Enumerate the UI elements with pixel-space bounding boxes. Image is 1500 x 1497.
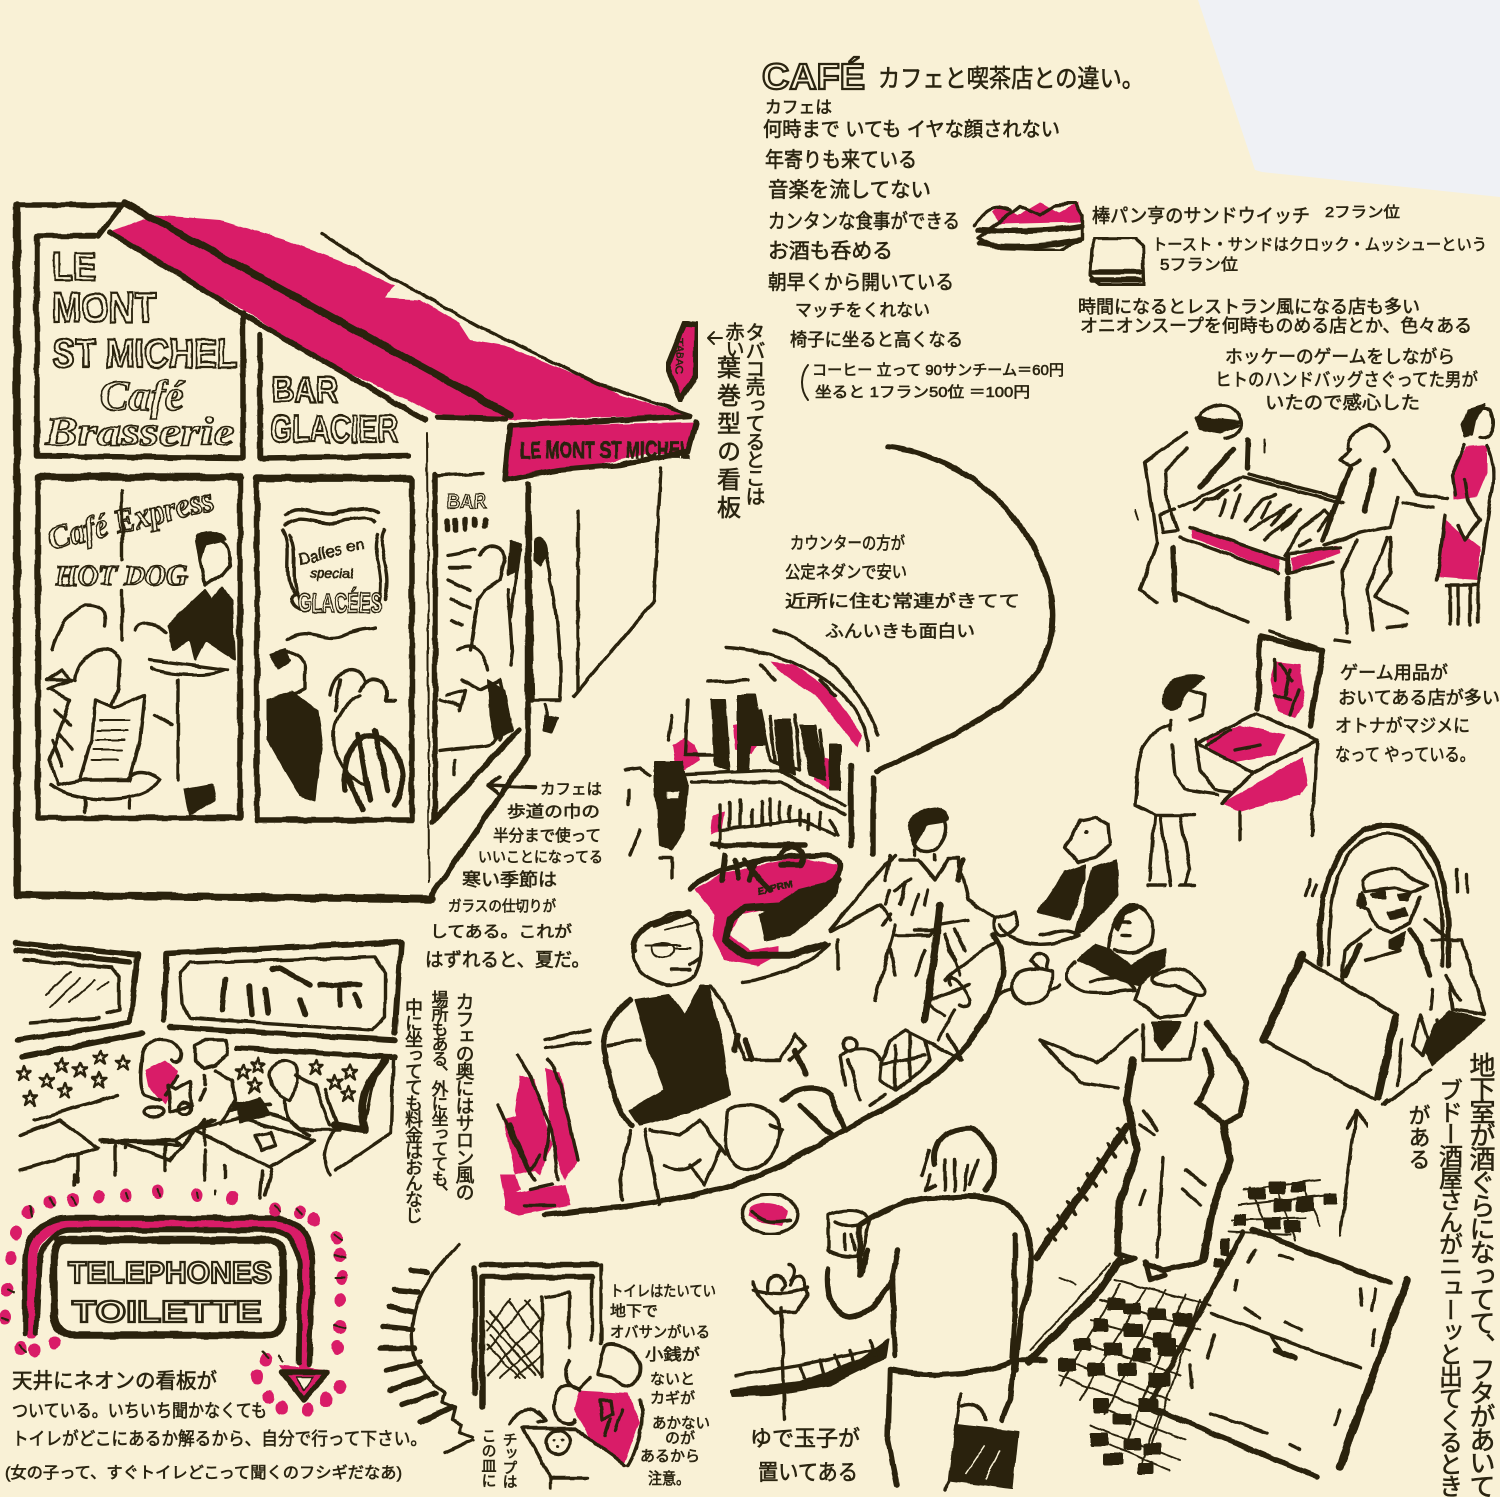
counter caption: 公定ネダンで安い (785, 563, 907, 582)
pinball machine caption: ゲーム用品が (1340, 663, 1448, 683)
sidewalk caption: 半分まで使って (493, 827, 601, 845)
bottom right vertical caption: ブドー酒屋さんがニューッと出てくるとき (1434, 1078, 1462, 1497)
waiter (197, 534, 230, 585)
valance lettering: LE MONT ST MICHEL (520, 437, 690, 464)
ashtray (742, 1194, 798, 1234)
percolator left (655, 762, 688, 850)
salon caption (403, 990, 474, 1223)
toilet caption: のが (665, 1430, 695, 1447)
counter caption: カウンターの方が (790, 534, 905, 553)
pinball machine caption (1335, 663, 1500, 765)
icon: toast sandwich (1090, 238, 1144, 285)
neon sign (0, 1185, 348, 1417)
milk jug (725, 1105, 779, 1170)
differences list: 音楽を流してない (768, 179, 931, 202)
neon caption: ついている。いちいち聞かなくても (12, 1401, 267, 1421)
toilet caption: カギが (650, 1390, 695, 1407)
tip plate caption: チップは (500, 1432, 518, 1489)
tabac arrow (708, 332, 722, 344)
pink woman (145, 1060, 178, 1105)
sign: Le Mont St Michel (44, 245, 238, 454)
telephones toilette lettering: TOILETTE (72, 1294, 262, 1329)
stars (17, 1050, 357, 1105)
player right (1340, 425, 1389, 465)
sign: Le Mont St Michel: MONT (52, 284, 156, 331)
differences list: お酒も呑める (768, 240, 893, 263)
toilet caption: あるから (640, 1448, 700, 1465)
tables (20, 1118, 315, 1198)
passer-by (532, 540, 561, 730)
salon caption: カフェの奥にはサロン風の (452, 992, 474, 1200)
window: glaces: GLACÉES (298, 587, 382, 618)
glass (828, 1210, 870, 1257)
boiled eggs caption (750, 1426, 860, 1485)
toilet caption: 小銭が (645, 1346, 700, 1364)
pinball machine caption: なって やっている。 (1335, 745, 1475, 765)
window: glaces (268, 508, 402, 810)
boiled eggs caption: ゆで玉子が (750, 1426, 860, 1451)
sidewalk caption: してある。これが (430, 923, 572, 941)
differences list: 朝早くから開いている (768, 271, 954, 294)
salon caption: 場所もある、外に坐ってても、 (428, 990, 448, 1200)
sidewalk lines (527, 468, 661, 700)
cellar arrow (1340, 1110, 1367, 1235)
counter caption (785, 534, 1020, 641)
sidewalk caption (425, 781, 603, 971)
coffee machine (691, 855, 839, 889)
back patrons (330, 670, 395, 785)
customers (52, 605, 228, 675)
awning (110, 203, 696, 480)
bottom right vertical caption (1406, 1052, 1496, 1497)
hockey game caption (1215, 347, 1478, 413)
bentwood chair (344, 730, 402, 810)
bowl of eggs (753, 1265, 808, 1420)
differences list (763, 98, 1060, 350)
pointer line (781, 1308, 785, 1420)
illustration: waiter (830, 808, 995, 1020)
sign: Bar Glacier (270, 369, 398, 451)
tabac caption: タバコ売ってるとこは (742, 322, 765, 504)
grating small (1228, 1180, 1330, 1240)
toilet caption: ないと (650, 1371, 695, 1388)
coffee prices: 坐ると 1フラン50位 ＝100円 (815, 384, 1030, 401)
toilet caption: あかない (652, 1415, 710, 1432)
illustration: table edge hatch (730, 1340, 888, 1396)
pinball machine caption: おいてある店が多い (1338, 688, 1500, 708)
illustration: man from behind with bag (827, 1128, 1031, 1490)
coffee prices: コーヒー 立って 90サンチーム＝60円 (812, 362, 1064, 379)
restaurant note (1078, 297, 1472, 336)
sign: Bar Glacier: GLACIER (270, 409, 398, 451)
salon man (195, 1040, 235, 1125)
grating large (1060, 1280, 1210, 1470)
neon tube (32, 1224, 306, 1365)
pinball machine caption: オトナがマジメに (1335, 716, 1470, 736)
differences list: 年寄りも来ている (765, 149, 917, 172)
open hatch panel (1263, 955, 1398, 1097)
telephones toilette lettering: TELEPHONES (68, 1255, 272, 1290)
counter caption: ふんいきも面白い (825, 622, 975, 641)
differences list: カンタンな食事ができる (768, 210, 960, 233)
toast caption: トースト・サンドはクロック・ムッシューという (1152, 236, 1487, 254)
illustration: man emerging from cellar (1263, 825, 1485, 1105)
sidewalk caption: 歩道の巾の (507, 803, 600, 821)
toilet caption: 地下で (610, 1303, 658, 1320)
hockey game caption: ヒトのハンドバッグさぐってた男が (1215, 370, 1478, 390)
restaurant note: オニオンスープを何時ものめる店とか、色々ある (1080, 316, 1472, 336)
window: glaces: Dalles en (297, 536, 366, 569)
illustration: toilet door and attendant (381, 1245, 642, 1488)
counter caption: 近所に住む常連がきてて (785, 592, 1020, 611)
woman with handbag (1437, 445, 1487, 580)
salon woman (270, 1061, 330, 1135)
illustration: bartender pouring (604, 912, 805, 1205)
inner box (54, 1240, 283, 1335)
sign: Le Mont St Michel: ST MICHEL (52, 332, 238, 376)
toast caption: 5フラン位 (1160, 256, 1238, 274)
illustration: trap door and grating (1060, 1180, 1407, 1477)
differences list: 椅子に坐ると高くなる (790, 330, 963, 350)
window: glaces: special (310, 565, 354, 581)
bottom right vertical caption: がある (1406, 1104, 1430, 1170)
table (1180, 474, 1343, 573)
sidewalk caption: カフェは (540, 781, 602, 798)
tabac caption: 赤い (722, 322, 744, 356)
mirrors (16, 943, 138, 1040)
tabac cigar sign (667, 323, 697, 400)
neon arrow head (280, 1365, 331, 1402)
differences list: カフェは (765, 98, 832, 117)
toilet caption: 注意。 (648, 1470, 690, 1488)
illustration: pinball player (1135, 632, 1323, 885)
neon caption: トイレがどこにあるか解るから、自分で行って下さい。 (12, 1429, 427, 1449)
neon caption: (女の子って、すぐトイレどこって聞くのフシギだなあ) (5, 1464, 402, 1482)
sidewalk caption: はずれると、夏だ。 (425, 949, 590, 971)
sandwich caption (1092, 204, 1400, 227)
sidewalk arrow (487, 777, 535, 795)
toilet caption: トイレはたいてい (610, 1283, 716, 1300)
differences list: 何時まで いても イヤな顔されない (763, 118, 1060, 141)
sidewalk caption: いいことになってる (478, 849, 603, 866)
player left (1140, 432, 1187, 602)
sign: Bar Glacier: BAR (272, 369, 338, 410)
window: cafe express: Café Express (45, 481, 217, 558)
telephones toilette lettering (68, 1255, 272, 1329)
neon caption: 天井にネオンの看板が (12, 1370, 217, 1393)
sandwich caption: 棒パン亨のサンドウイッチ (1092, 205, 1310, 227)
side window with patrons: BAR (447, 491, 488, 513)
sidewalk caption: 寒い季節は (462, 870, 557, 890)
tabac cigar sign: TABAC (673, 338, 685, 374)
icon: baguette sandwich (975, 202, 1082, 250)
coffee prices (802, 362, 1064, 401)
tip plate caption (480, 1428, 518, 1489)
window: cafe express (45, 481, 235, 815)
cafe title: CAFÉ (762, 56, 865, 97)
hockey game caption: いたので感心した (1265, 393, 1420, 413)
illustration: bald customer (1038, 817, 1118, 935)
tip plate caption: この皿に (480, 1428, 496, 1488)
neon caption (5, 1370, 427, 1482)
toilet caption: オバサンがいる (610, 1324, 710, 1341)
bench (22, 1033, 395, 1057)
cafe title (762, 56, 1144, 97)
tabac caption: 葉巻型の看板 (712, 355, 740, 523)
briefcase (950, 1425, 1018, 1488)
side window with patrons (433, 473, 561, 822)
illustration: pink glass display (498, 1030, 590, 1215)
sandwich caption: 2フラン位 (1325, 204, 1400, 221)
attendant (574, 1390, 640, 1463)
saucer table (523, 1428, 625, 1488)
newspaper (80, 695, 145, 780)
illustration: hockey table players (1135, 405, 1493, 642)
building frame (17, 205, 432, 899)
illustration: salon (16, 942, 401, 1198)
sign: Le Mont St Michel: Café (100, 374, 185, 420)
floor edge and hatching (1020, 1127, 1127, 1362)
illustration: bar shelf and coffee machine (625, 630, 878, 982)
sidewalk caption: ガラスの仕切りが (448, 898, 556, 915)
illustration: bar shelf and coffee machine: EXPRM (756, 880, 793, 898)
illustration: counter utensils (545, 912, 1080, 1215)
boiled eggs caption: 置いてある (758, 1460, 858, 1485)
restaurant note: 時間になるとレストラン風になる店も多い (1078, 297, 1420, 317)
bottom right vertical caption: 地下室が酒ぐらになってて、フタがあいて (1466, 1052, 1496, 1497)
window: cafe express: HOT DOG (54, 561, 187, 592)
illustration: workman in overalls (1040, 969, 1247, 1280)
salon caption: 中に坐ってても料金はおんなじ (403, 998, 423, 1223)
toast caption (1152, 236, 1487, 274)
dots (0, 1185, 348, 1417)
differences list: マッチをくれない (795, 301, 930, 320)
toilet caption (610, 1283, 716, 1488)
illustration: customer at counter (1067, 905, 1165, 993)
speech bubble curve (877, 447, 1053, 772)
tabac caption (712, 322, 765, 523)
cafe title: カフェと喫茶店との違い。 (878, 65, 1144, 93)
cafe storefront (17, 205, 661, 899)
dark coat patron (275, 652, 305, 695)
hockey game caption: ホッケーのゲームをしながら (1225, 347, 1455, 367)
sign: Le Mont St Michel: LE (52, 245, 96, 289)
sign: Le Mont St Michel: Brasserie (44, 409, 235, 454)
